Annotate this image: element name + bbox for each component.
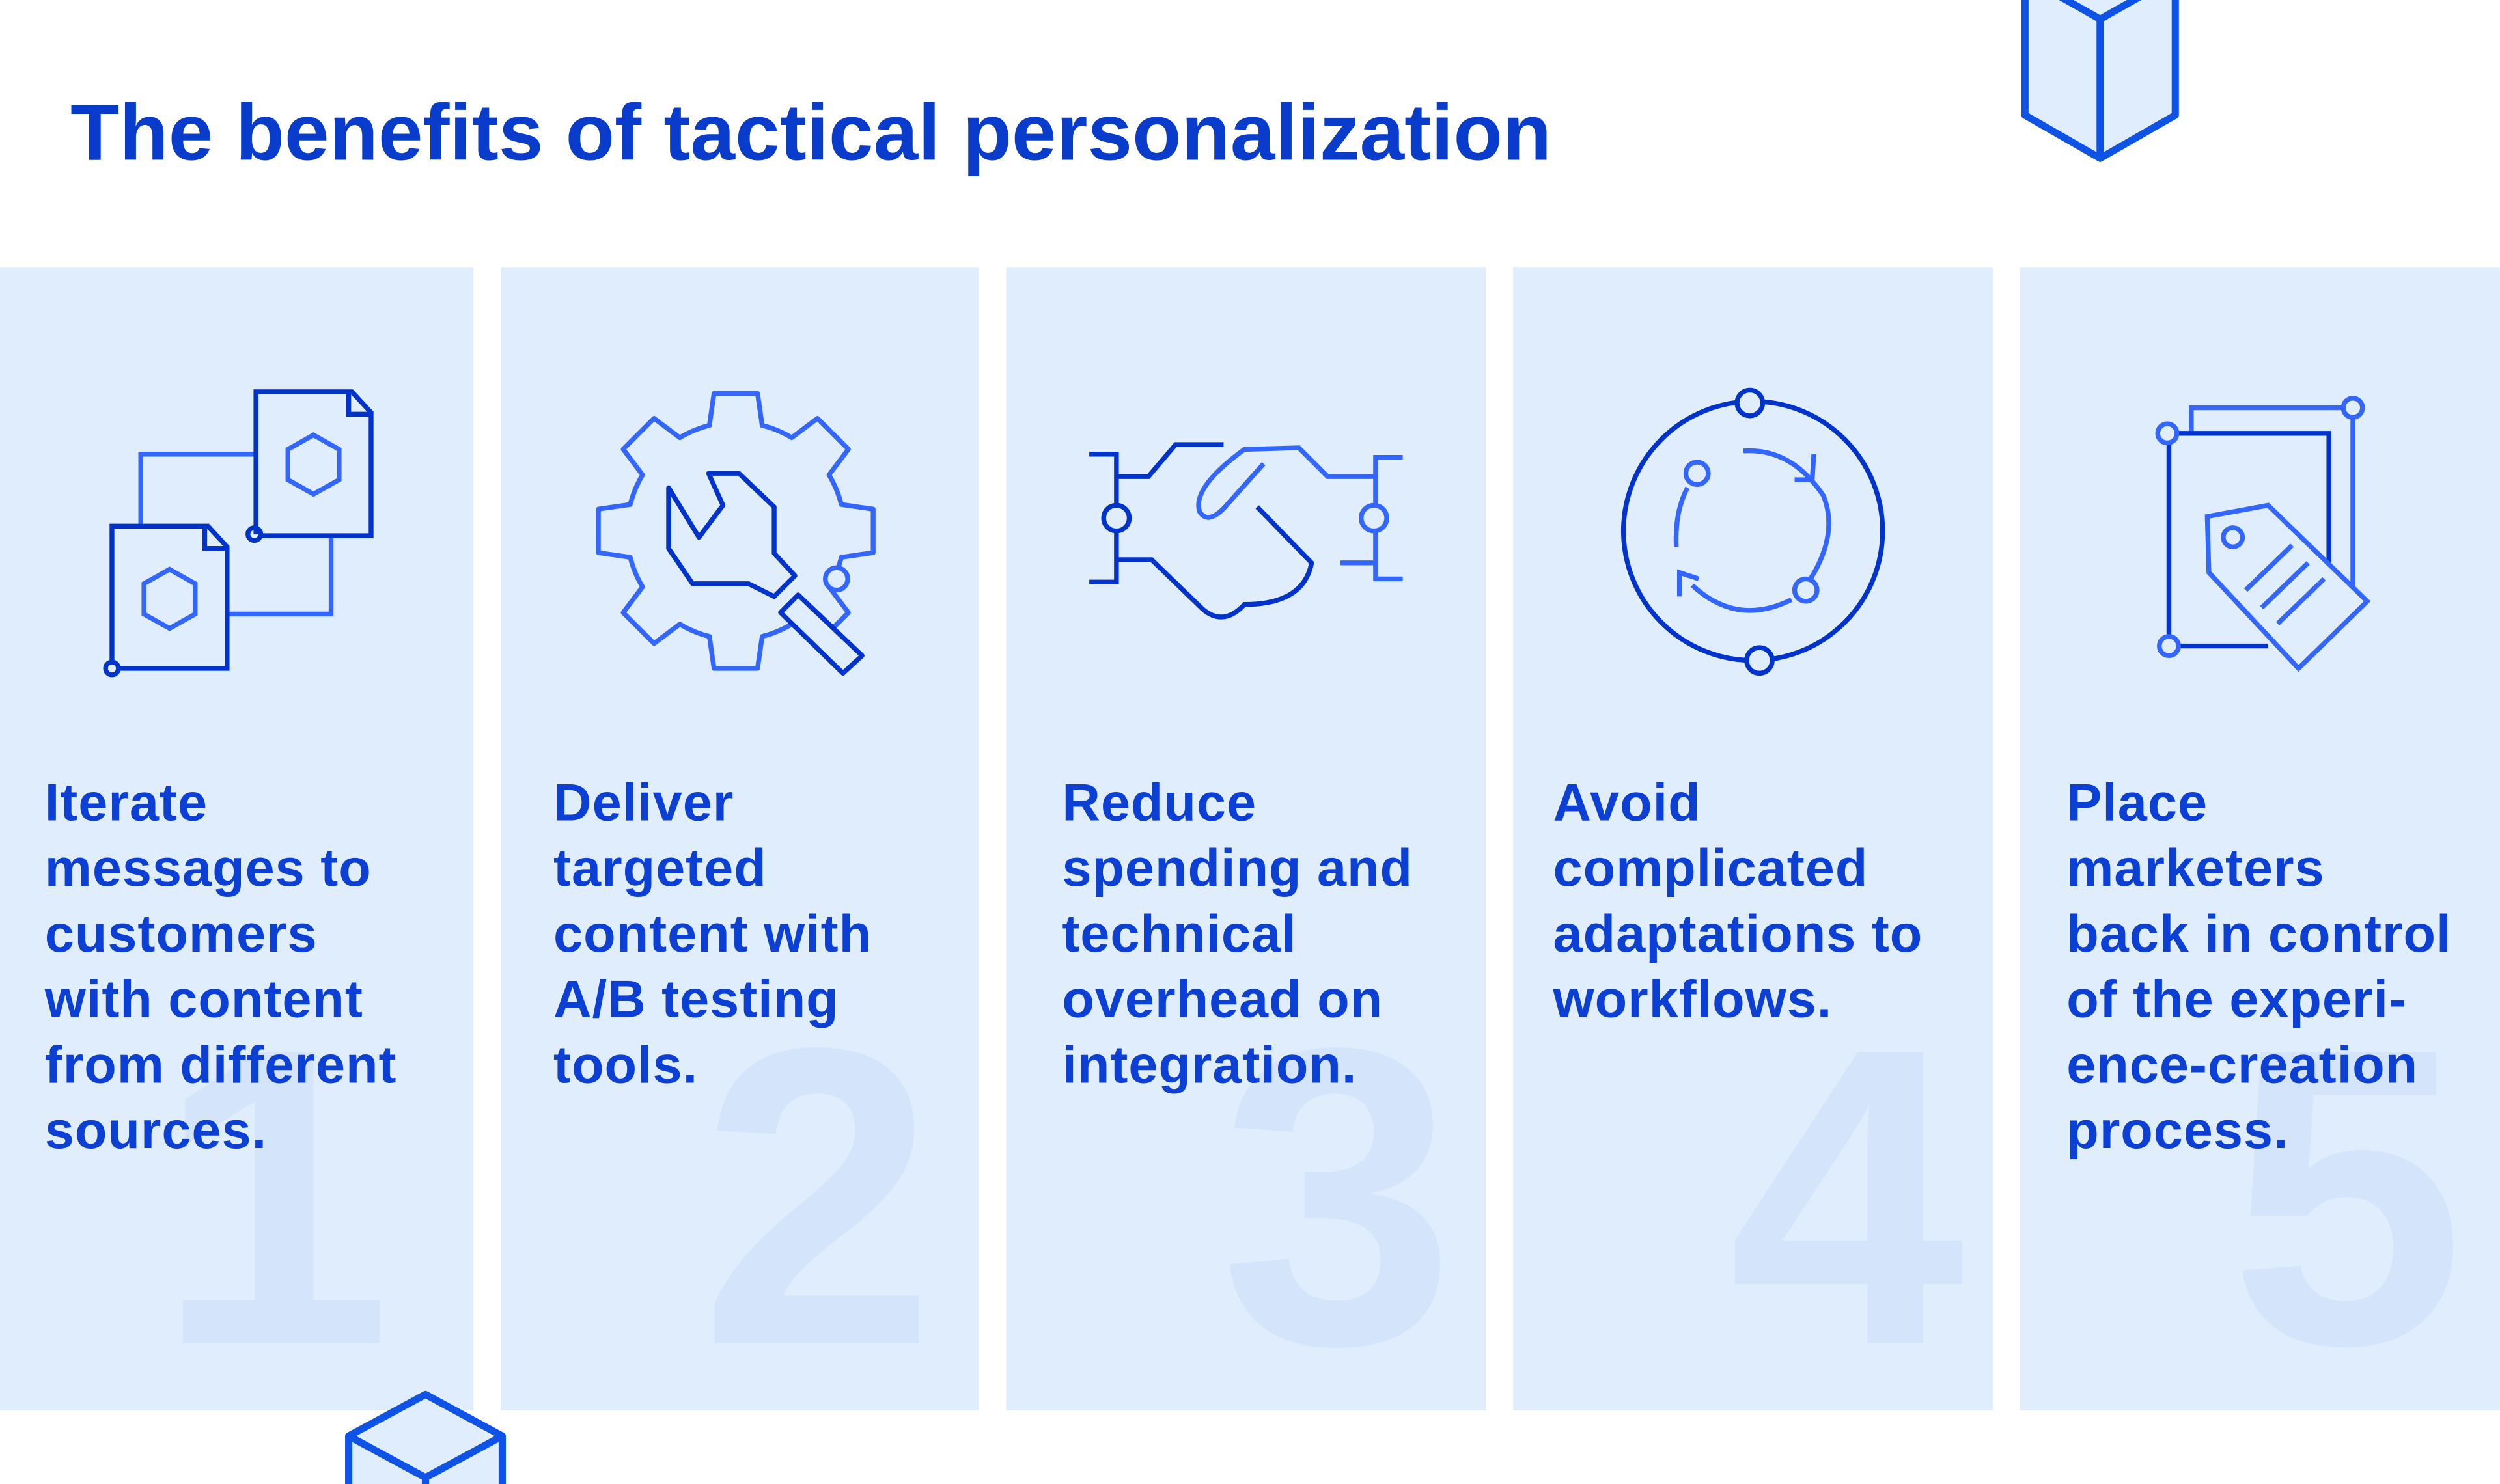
text 1: messages to	[45, 839, 372, 898]
text 3: technical	[1062, 905, 1297, 963]
text 4: adaptations to	[1553, 905, 1923, 963]
text 4: workflows.	[1553, 970, 1832, 1029]
text 5: process.	[2066, 1101, 2288, 1160]
text 4: complicated	[1553, 839, 1868, 898]
text 2: A/B testing	[553, 970, 839, 1029]
text 3: integration.	[1062, 1036, 1357, 1094]
text 3: spending and	[1062, 839, 1413, 898]
text 5: of the experi-	[2066, 970, 2407, 1029]
icon: handshake	[1089, 445, 1403, 617]
text 2: Deliver	[553, 773, 734, 832]
number 1: 1	[156, 960, 392, 1433]
text 3: overhead on	[1062, 970, 1383, 1029]
text 1: with content	[44, 970, 363, 1029]
panel 4	[1513, 267, 1993, 1433]
title: The benefits of tactical personalization	[70, 89, 1551, 178]
text 5: back in control	[2066, 905, 2451, 963]
text 2: content with	[553, 905, 872, 963]
text 5: marketers	[2066, 839, 2325, 898]
number 2: 2	[700, 960, 936, 1433]
icon: documents	[105, 392, 371, 675]
number 3: 3	[1220, 960, 1456, 1433]
number 5: 5	[2229, 960, 2465, 1433]
panel 3	[1006, 267, 1486, 1433]
text 1: customers	[45, 905, 318, 963]
text 2: tools.	[553, 1036, 698, 1094]
panel 1	[0, 267, 473, 1433]
cube top right	[2025, 0, 2175, 158]
icon: cycle	[1624, 390, 1883, 673]
icon: document with tag	[2158, 398, 2367, 668]
text 1: Iterate	[45, 773, 208, 832]
text 3: Reduce	[1062, 773, 1257, 832]
text 4: Avoid	[1553, 773, 1701, 832]
icon: gear and wrench	[598, 393, 873, 673]
text 1: from different	[45, 1036, 396, 1094]
panel 2	[501, 267, 979, 1433]
text 5: ence-creation	[2066, 1036, 2418, 1094]
panel 5	[2020, 267, 2500, 1433]
text 5: Place	[2066, 773, 2208, 832]
text 2: targeted	[553, 839, 767, 898]
number 4: 4	[1729, 960, 1967, 1433]
text 1: sources.	[45, 1101, 267, 1160]
cube bottom	[349, 1394, 502, 1484]
